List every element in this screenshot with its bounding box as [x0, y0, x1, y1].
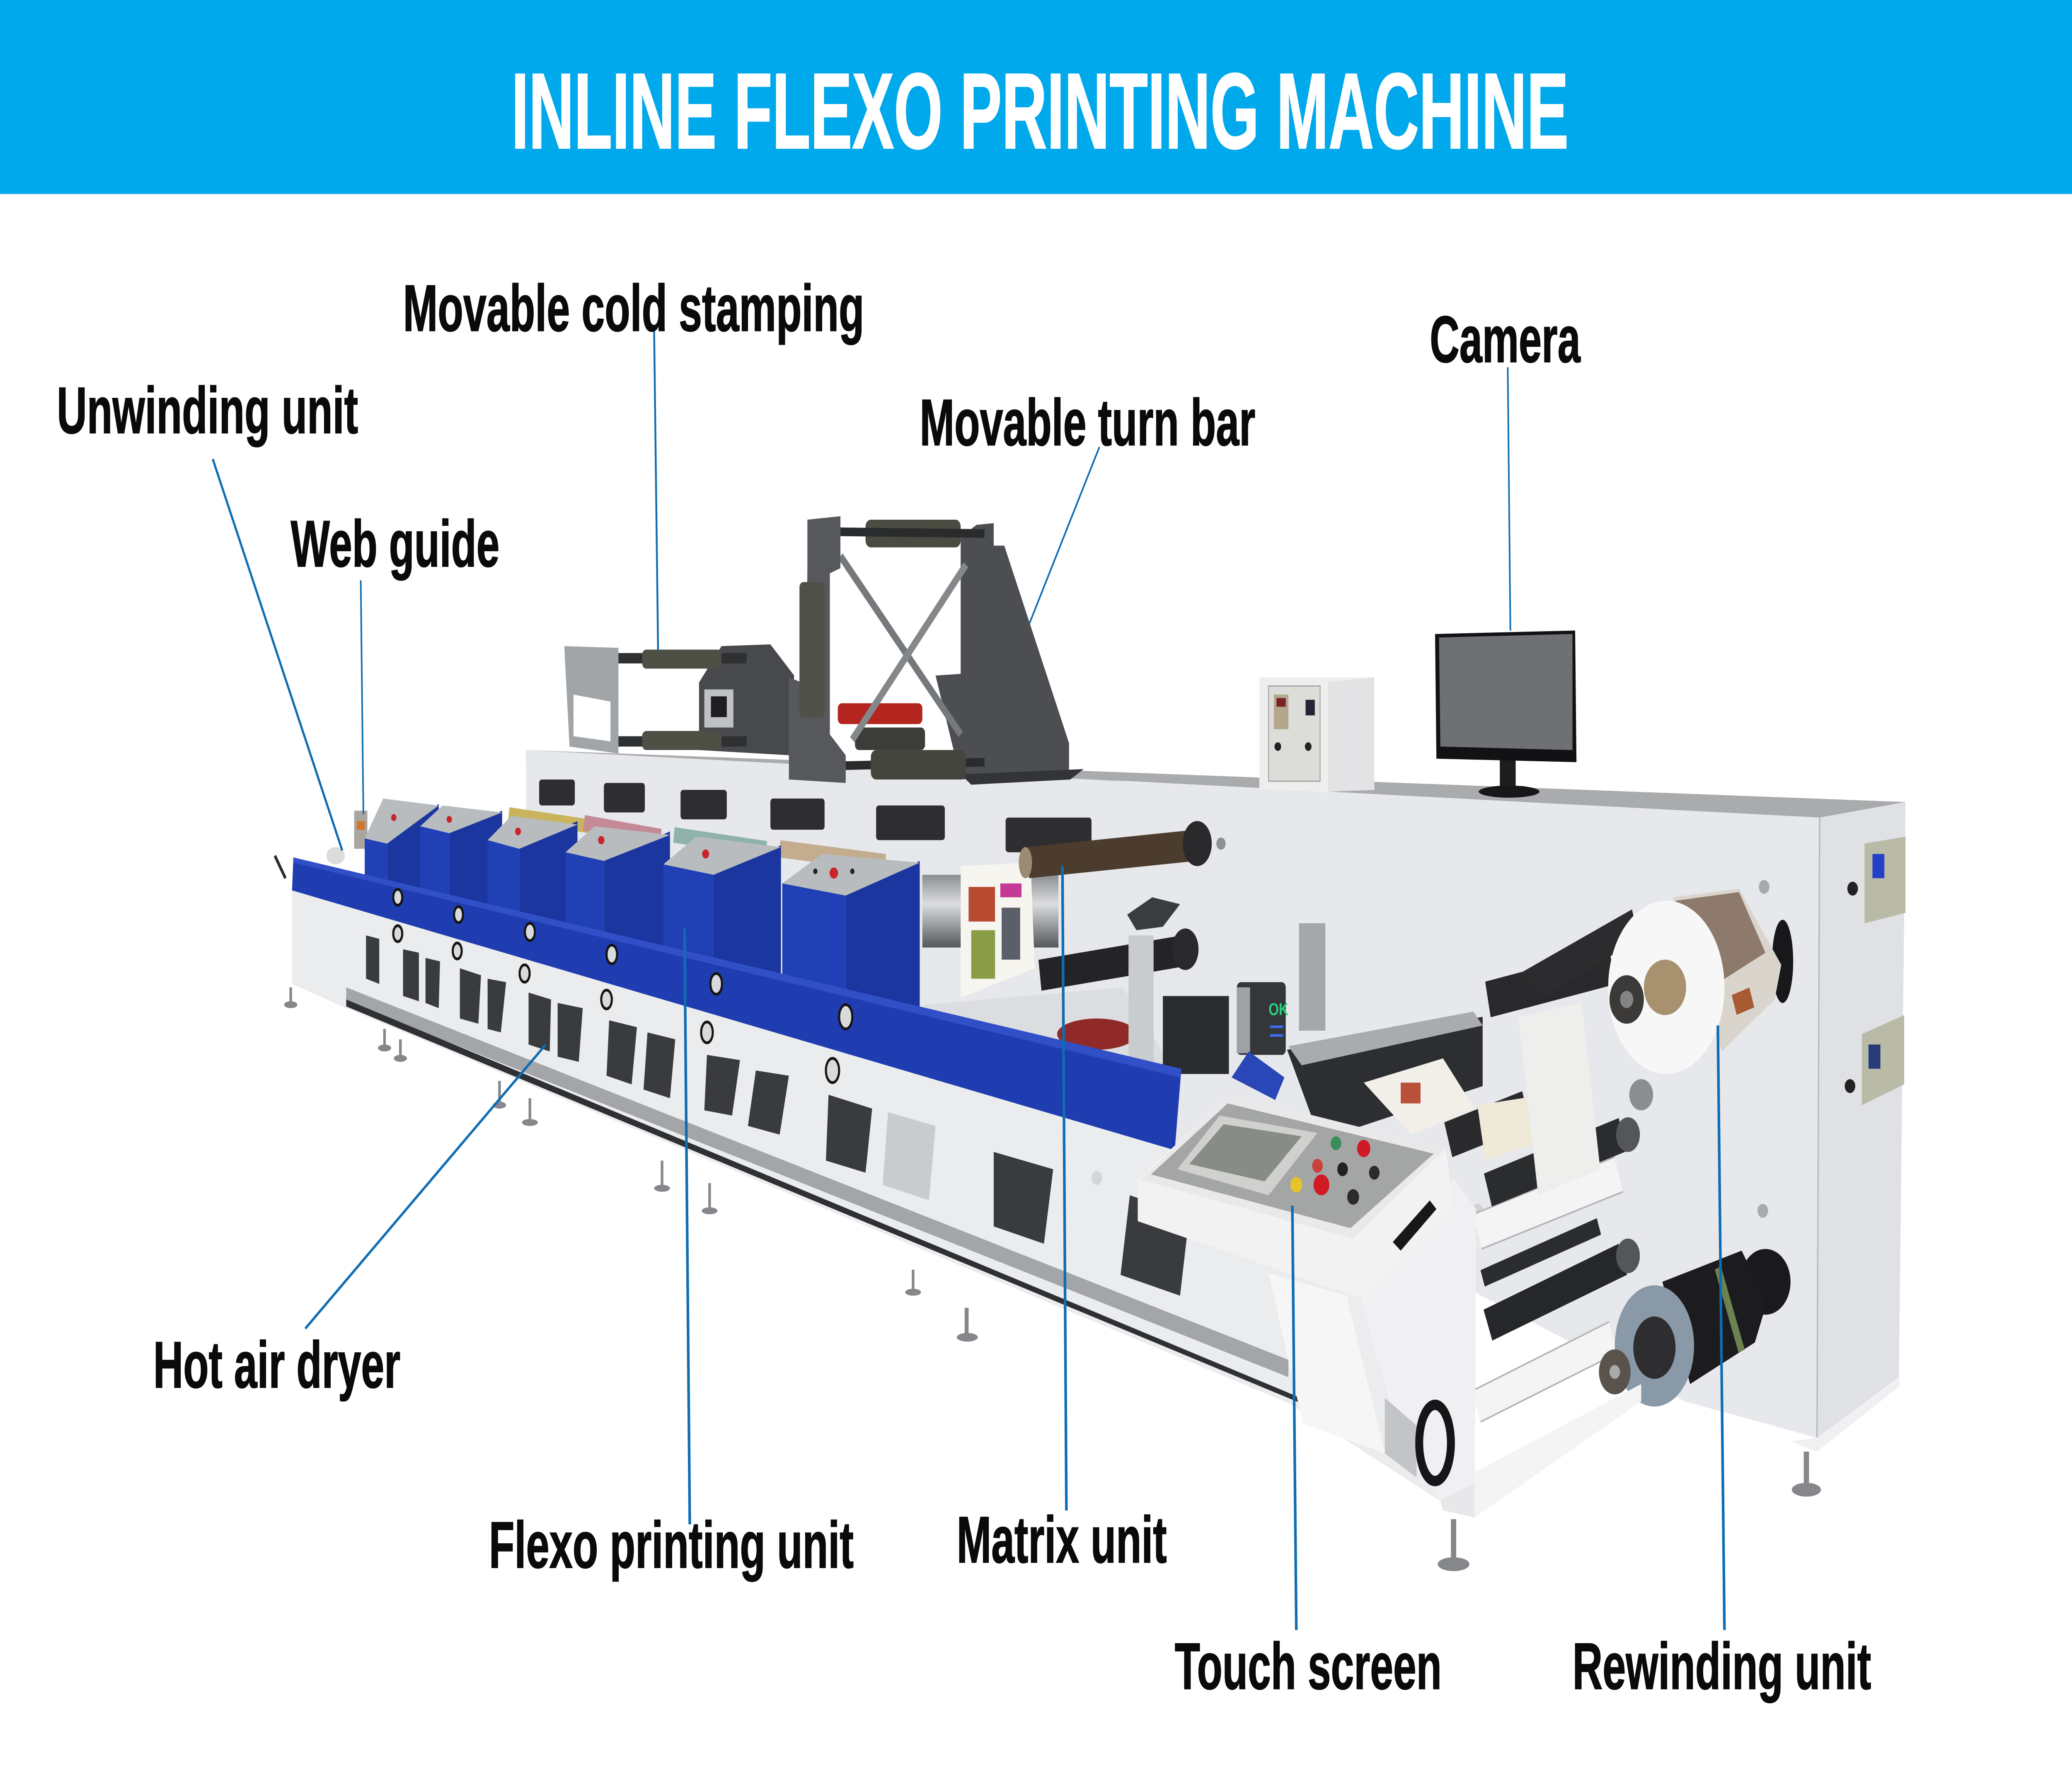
blue printing unit 2: [420, 806, 502, 953]
control box: [1259, 677, 1374, 792]
label: Touch screen: Touch screen: [1175, 1629, 1442, 1703]
hot air dryer windows: [366, 935, 1189, 1296]
blue printing unit 4: [566, 826, 670, 988]
slitting unit: [1232, 1012, 1483, 1140]
label: Flexo printing unit: [489, 928, 854, 1582]
touch screen console: [1138, 1095, 1454, 1299]
unwinding paper roll: [1608, 889, 1793, 1074]
movable turn bar unit: [789, 516, 1084, 784]
label: Movable turn bar: [920, 385, 1255, 624]
blue printing unit 5: [663, 837, 781, 1005]
label: Hot air dryer: Hot air dryer: [153, 1328, 400, 1402]
side frame and lower rail: [1361, 1178, 1641, 1518]
web guide and unwinding stand: [275, 811, 367, 878]
label: Movable turn bar: Movable turn bar: [920, 385, 1255, 459]
blue printing unit 1: [365, 799, 439, 927]
title banner: [0, 0, 2072, 194]
label: Movable cold stamping: [403, 271, 864, 649]
label: Flexo printing unit: Flexo printing unit: [489, 1508, 854, 1582]
label: Touch screen: [1175, 1206, 1442, 1703]
machine feet: [284, 988, 1821, 1571]
matrix unit rollers: [922, 821, 1229, 1074]
label: Matrix unit: Matrix unit: [957, 1503, 1167, 1576]
label: Rewinding unit: Rewinding unit: [1573, 1629, 1871, 1703]
back wall: [526, 750, 1905, 1452]
white web and rollers: [1448, 909, 1653, 1407]
label: Web guide: [291, 507, 499, 814]
label: Web guide: Web guide: [291, 507, 499, 581]
label: Movable cold stamping: Movable cold stamping: [403, 271, 864, 345]
blue beam: [292, 857, 1181, 1150]
pressure gauges: [393, 889, 852, 1082]
camera sensor and post: OK: [1268, 999, 1288, 1019]
label: Rewinding unit: [1573, 1025, 1871, 1703]
label: Camera: Camera: [1430, 303, 1581, 376]
label: Hot air dryer: [153, 1044, 546, 1402]
camera sensor and post: [1127, 897, 1325, 1063]
label: Unwinding unit: [57, 373, 358, 850]
back wall windows: [539, 780, 1092, 852]
side tension controllers: [1216, 837, 1905, 1218]
rewinding roll: [1599, 1249, 1791, 1407]
front frame: [292, 889, 1484, 1500]
label: Matrix unit: [957, 866, 1167, 1576]
machine illustration: [275, 516, 1905, 1571]
title: INLINE FLEXO PRINTING MACHINE: [511, 51, 1569, 171]
label: Camera: [1430, 303, 1581, 630]
label: Unwinding unit: Unwinding unit: [57, 373, 358, 447]
blue printing unit 6: [782, 854, 920, 1022]
monitor camera display: [1435, 630, 1576, 798]
printed rollers: [509, 814, 885, 863]
movable cold stamping unit: [564, 644, 794, 755]
blue printing unit 3: [488, 816, 577, 988]
